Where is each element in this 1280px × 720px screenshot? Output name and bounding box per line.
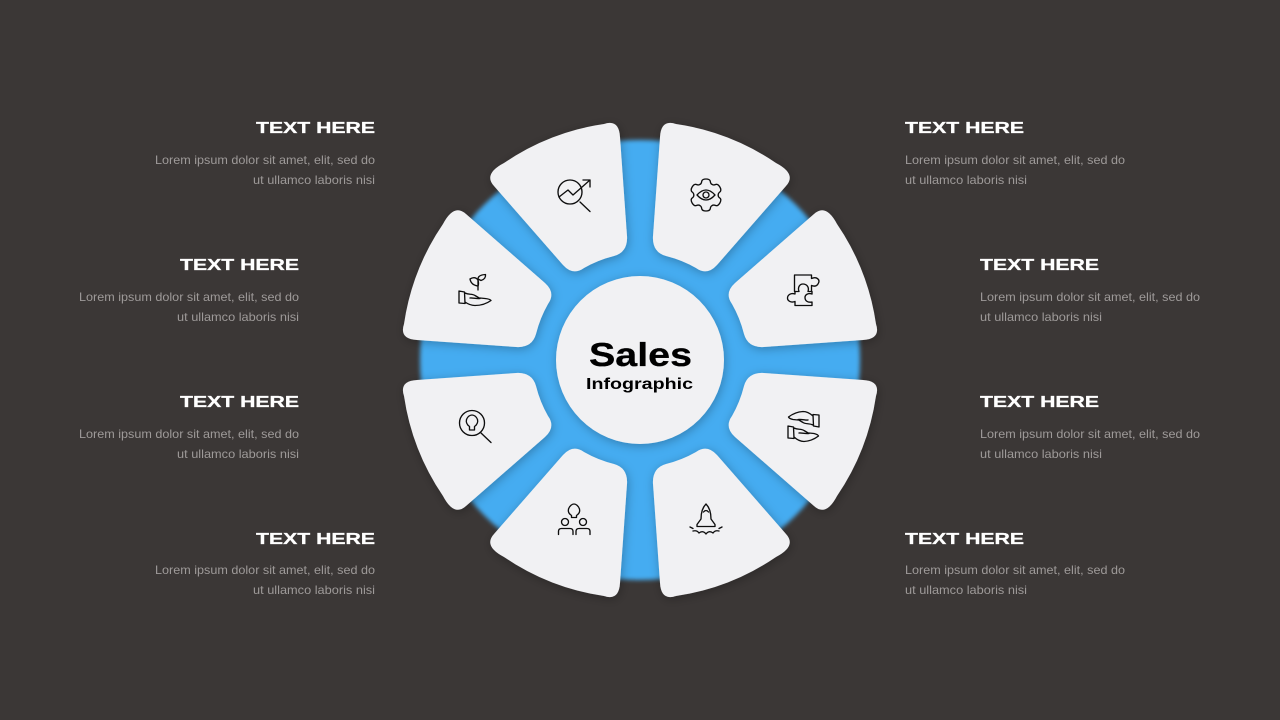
center title: Sales [589, 336, 692, 373]
text block: right 2 [980, 257, 1200, 324]
segment: people with idea [490, 449, 627, 597]
icon: puzzle pieces [788, 275, 819, 306]
text block: left 1: TEXT HERE [256, 120, 375, 137]
segment: puzzle [729, 210, 877, 347]
icon: magnifier with trend arrow [558, 180, 590, 212]
text block: right 2: Lorem ipsum dolor sit amet, elit, sed do [980, 290, 1200, 304]
icon: magnifier with light bulb [460, 410, 491, 442]
text block: right 1: ut ullamco laboris nisi [905, 173, 1027, 187]
center title [586, 336, 693, 393]
text block: left 1: Lorem ipsum dolor sit amet, elit, sed do [155, 153, 375, 167]
center circle [556, 276, 724, 444]
icon: hand holding sprout [459, 274, 491, 306]
text block: right 1 [905, 120, 1125, 187]
segment: bulb search [403, 373, 551, 510]
text block: right 3: ut ullamco laboris nisi [980, 447, 1102, 461]
text block: left 2 [79, 257, 299, 324]
icon: gear with eye [689, 179, 723, 211]
text block: left 3: Lorem ipsum dolor sit amet, elit, sed do [79, 427, 299, 441]
text block: left 4: TEXT HERE [256, 531, 375, 548]
text block: right 3 [980, 394, 1200, 461]
center title: Infographic [586, 376, 693, 393]
text block: right 4 [905, 531, 1125, 597]
text block: left 2: Lorem ipsum dolor sit amet, elit, sed do [79, 290, 299, 304]
segment: hands [729, 373, 877, 510]
text block: right 1: Lorem ipsum dolor sit amet, elit, sed do [905, 153, 1125, 167]
segment: sprout in hand [403, 210, 551, 347]
text block: right 4: TEXT HERE [905, 531, 1024, 548]
segment: chart search [490, 123, 627, 271]
blue disc [420, 140, 860, 580]
text block: right 1: TEXT HERE [905, 120, 1024, 137]
text block: right 2: ut ullamco laboris nisi [980, 310, 1102, 324]
segment: rocket [653, 449, 790, 597]
text block: right 4: ut ullamco laboris nisi [905, 583, 1027, 597]
text block: left 4: Lorem ipsum dolor sit amet, elit, sed do [155, 563, 375, 577]
text block: left 1: ut ullamco laboris nisi [253, 173, 375, 187]
text block: left 1 [155, 120, 375, 187]
text block: right 3: Lorem ipsum dolor sit amet, elit, sed do [980, 427, 1200, 441]
text block: left 3: TEXT HERE [180, 394, 299, 411]
text block: left 3: ut ullamco laboris nisi [177, 447, 299, 461]
icon: people with light bulb [558, 504, 590, 534]
text block: left 2: TEXT HERE [180, 257, 299, 274]
text block: right 4: Lorem ipsum dolor sit amet, elit, sed do [905, 563, 1125, 577]
icon: rocket [690, 504, 722, 534]
text block: right 3: TEXT HERE [980, 394, 1099, 411]
text block: left 3 [79, 394, 299, 461]
text block: left 4 [155, 531, 375, 597]
icon: two hands [788, 412, 819, 442]
text block: right 2: TEXT HERE [980, 257, 1099, 274]
text block: left 4: ut ullamco laboris nisi [253, 583, 375, 597]
text block: left 2: ut ullamco laboris nisi [177, 310, 299, 324]
segment: gear eye [653, 123, 790, 271]
